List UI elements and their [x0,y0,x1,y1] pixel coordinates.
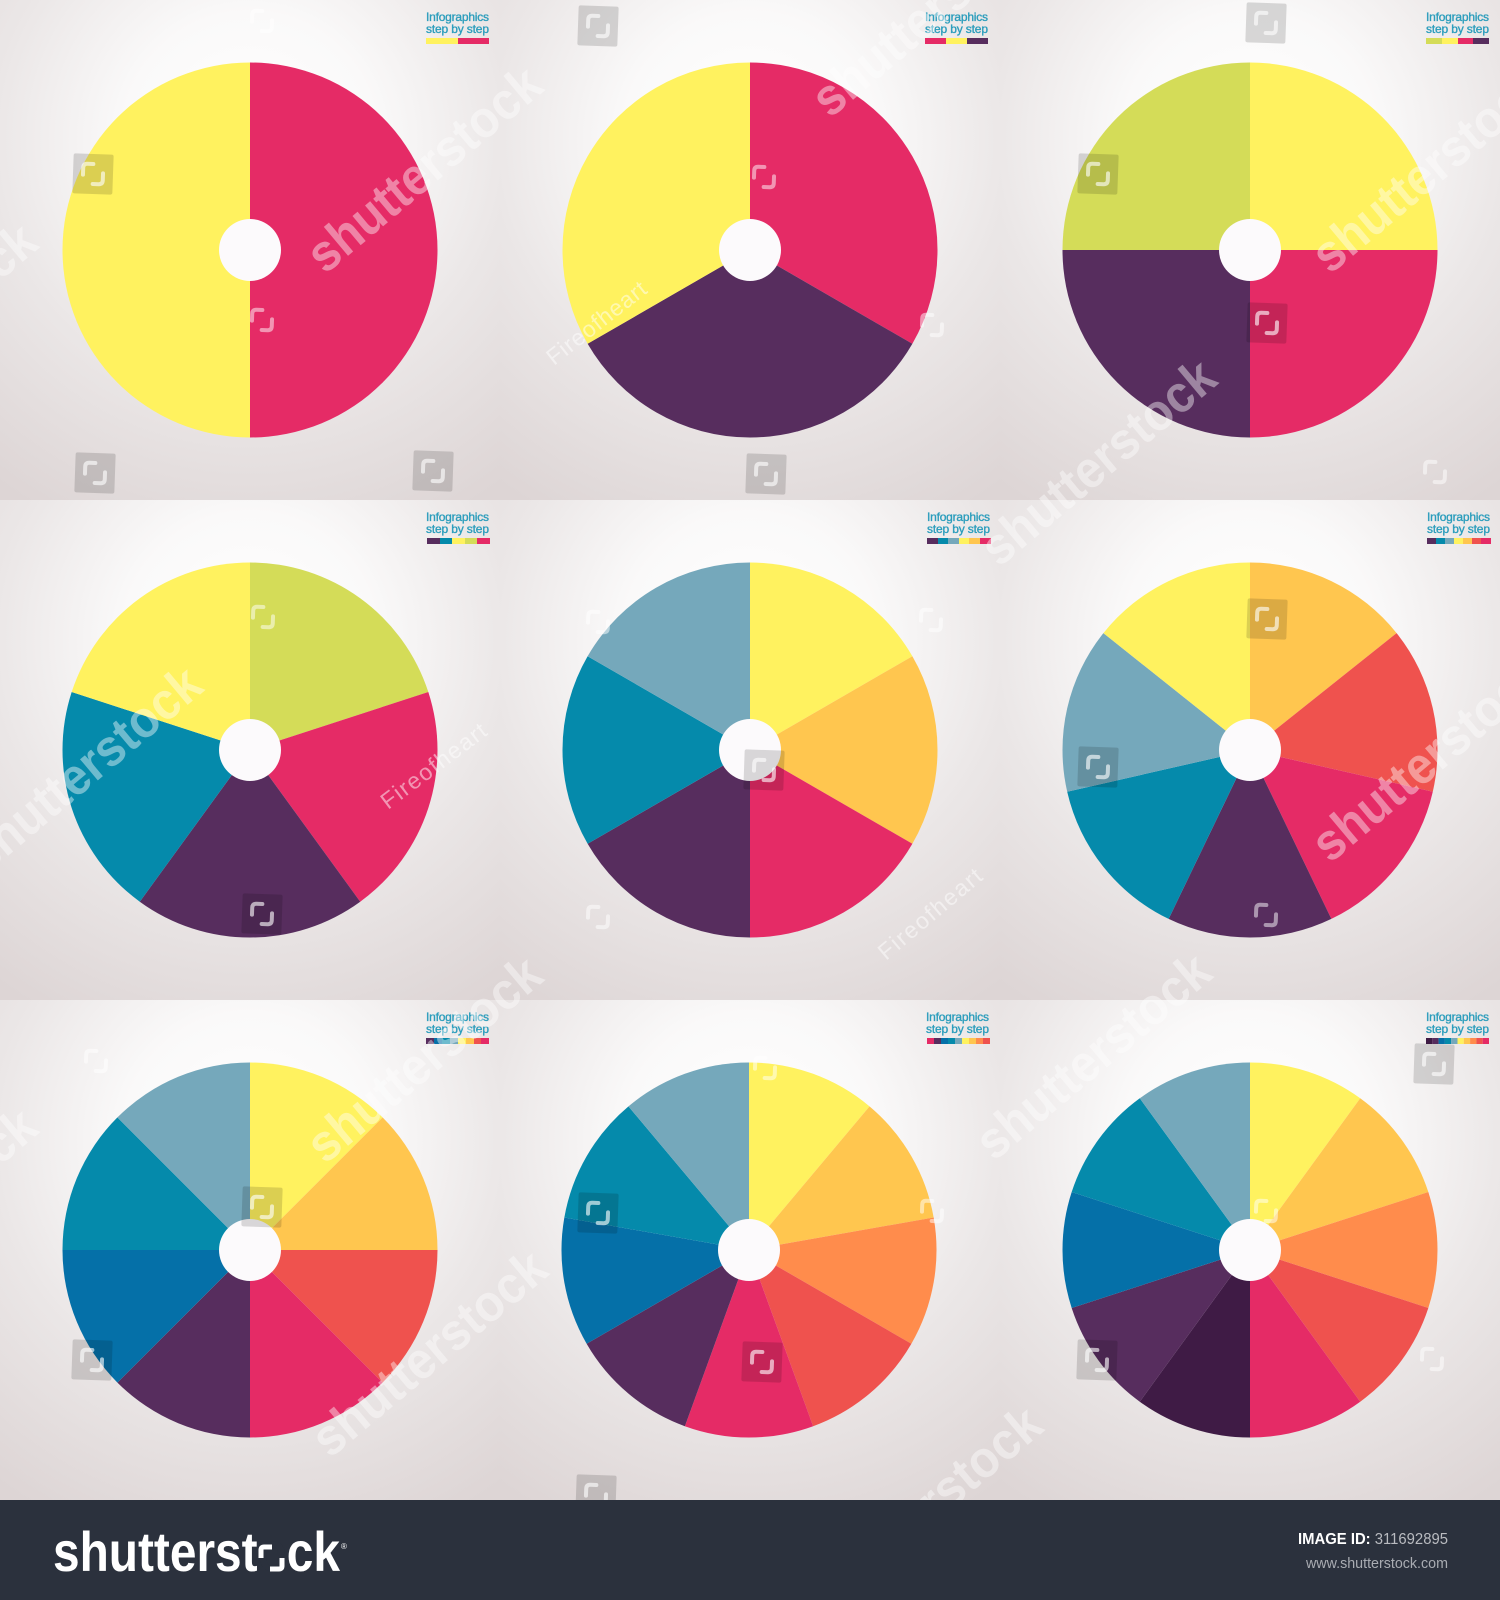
wheel: 5 segments [63,562,437,937]
wheel: 3 segments [562,62,938,438]
wheel: 4 segments [1062,62,1438,438]
panel: 5 segment wheel [0,500,500,1000]
image id: IMAGE ID: 311692895 [1298,1531,1448,1548]
stock watermarks overlay: shutterstock [964,942,1222,1171]
legend: 6 segments [927,510,991,544]
legend: 8 segments: Infographics [426,1010,489,1024]
footer bar [0,1500,1500,1600]
legend: 3 segments: step by step [925,22,988,36]
panel: 3 segment wheel [500,0,1000,500]
wheel: 6 segments [562,562,938,938]
stock watermarks overlay: shutterstock [295,945,553,1174]
panel: 2 segment wheel [0,0,500,500]
legend: 4 segments [1426,10,1489,44]
legend: 9 segments [926,1010,990,1044]
legend: 10 segments [1426,1010,1489,1044]
stock watermarks overlay: Fireofheart [541,275,652,370]
legend: 6 segments: step by step [927,522,990,536]
legend: 7 segments: step by step [1427,522,1490,536]
legend: 2 segments [426,10,489,44]
legend: 5 segments [426,510,490,544]
panel: 10 segment wheel [1000,1000,1500,1500]
legend: 5 segments: step by step [426,522,489,536]
legend: 3 segments [925,10,988,44]
legend: 8 segments: step by step [426,1022,489,1036]
legend: 3 segments: Infographics [925,10,988,24]
legend: 6 segments: Infographics [927,510,990,524]
legend: 2 segments: Infographics [426,10,489,24]
stock watermarks overlay: Fireofheart [375,717,492,814]
wheel: 8 segments [62,1062,438,1438]
legend: 10 segments: step by step [1426,1022,1489,1036]
panel: 4 segment wheel [1000,0,1500,500]
legend: 2 segments: step by step [426,22,489,36]
wheel: 2 segments [62,62,438,438]
legend: 10 segments: Infographics [1426,1010,1489,1024]
legend: 9 segments: step by step [926,1022,989,1036]
legend: 7 segments: Infographics [1427,510,1490,524]
stock watermarks overlay: Fireofheart [873,862,988,965]
stock watermarks overlay: shutterstock [300,1239,558,1468]
stock watermarks overlay: shutterstock [295,55,553,284]
stock watermarks overlay: shutterstock [969,348,1227,577]
panel: 8 segment wheel [0,1000,500,1500]
wheel: 10 segments [1063,1062,1437,1438]
panel: 7 segment wheel [1000,500,1500,1000]
legend: 8 segments [426,1010,489,1044]
legend: 4 segments: step by step [1426,22,1489,36]
website url: www.shutterstock.com [1305,1555,1448,1572]
legend: 5 segments: Infographics [426,510,489,524]
legend: 4 segments: Infographics [1426,10,1489,24]
panel: 6 segment wheel [500,500,1000,1000]
legend: 7 segments [1427,510,1491,544]
wheel: 9 segments [562,1062,936,1437]
legend: 9 segments: Infographics [926,1010,989,1024]
wheel: 7 segments [1063,562,1437,937]
footer logo: shutterstock: shutterstock [53,1520,341,1583]
panel: 9 segment wheel [500,1000,1000,1500]
footer logo: shutterstock: ® [341,1542,347,1551]
